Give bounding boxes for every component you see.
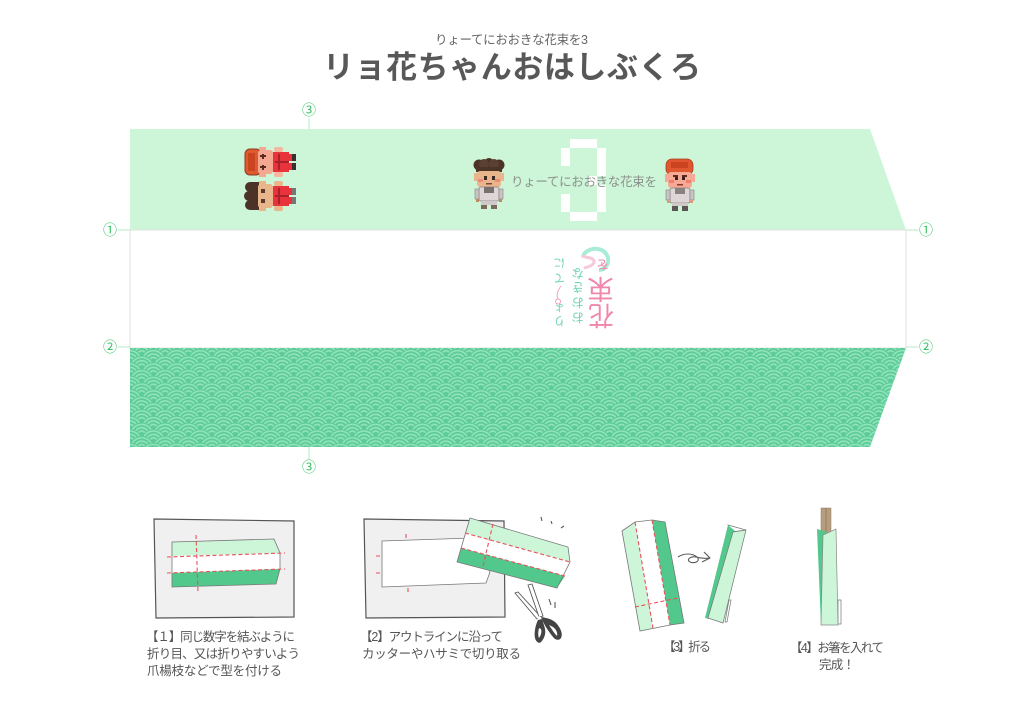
step 2 illustration (364, 518, 570, 618)
logo: upside-down vertical title (554, 249, 614, 330)
step 1 illustration (154, 519, 294, 618)
title: リョ花ちゃんおはしぶくろ (323, 50, 701, 85)
step 3 illustration: unfolded strip (622, 520, 684, 631)
fold marker: circled 3 top: ③ (302, 102, 316, 118)
panel: chopstick wrapper template (130, 129, 906, 447)
sprite: lying dark hair character (244, 181, 296, 211)
icon: scissors (515, 517, 564, 643)
fold marker: circled 3 bottom: ③ (302, 459, 316, 475)
step 4 caption (790, 640, 884, 672)
step 3 caption: 【3】折る (663, 639, 711, 654)
step 4 illustration: finished pouch with chopsticks (817, 508, 841, 625)
fold marker: circled 1 right: ① (919, 222, 933, 238)
fold marker: circled 2 left (103, 339, 130, 355)
step 1 caption: 【１】同じ数字を結ぶように (146, 629, 295, 644)
step 2 caption: カッターやハサミで切り取る (362, 647, 521, 661)
step 1 caption (146, 629, 300, 678)
step 1 caption: 爪楊枝などで型を付ける (147, 663, 282, 678)
teal text りょーてに: ょ (554, 302, 565, 314)
step 2 caption (360, 630, 521, 661)
fold marker: circled 1 left (103, 222, 130, 238)
big pixel numeral 3 (561, 139, 606, 221)
panel: top green band (130, 129, 906, 230)
pink text 花: 花 (588, 300, 614, 330)
fold marker: circled 1 right (906, 222, 933, 238)
step 2 caption: 【2】アウトラインに沿って (360, 630, 503, 644)
fold marker: circled 3 top (302, 102, 316, 129)
teal text おおきな: お (571, 295, 584, 309)
step 4 caption: 【4】お箸を入れて (790, 640, 884, 655)
teal text おおきな: き (571, 280, 584, 294)
small pink heart accent (556, 286, 561, 304)
teal text おおきな (571, 266, 584, 324)
step 3 illustration: folded strip (705, 525, 746, 623)
heart mark (582, 249, 608, 270)
band text: りょーてにおおきな花束を (511, 175, 657, 189)
teal text おおきな: な (571, 266, 584, 280)
sprite: standing red hair character (665, 159, 695, 211)
panel: middle white band (130, 230, 906, 348)
fold marker: circled 2 left: ② (103, 339, 117, 355)
fold marker: circled 2 right: ② (919, 339, 933, 355)
sprite: standing dark hair character (474, 158, 504, 209)
panel: bottom wave pattern band (130, 348, 906, 447)
step 1 caption: 折り目、又は折りやすいよう (147, 646, 300, 661)
pink text を: を (596, 257, 609, 272)
teal text りょーてに: に (554, 256, 565, 268)
subtitle: りょーてにおおきな花束を3 (435, 33, 588, 47)
teal text りょーてに (554, 256, 565, 327)
step 4 caption: 完成！ (819, 658, 855, 672)
arrow: fold direction (678, 552, 710, 563)
fold marker: circled 3 bottom (302, 447, 316, 475)
fold marker: circled 2 right (906, 339, 933, 355)
pink text 束: 束 (587, 273, 614, 303)
fold marker: circled 1 left: ① (103, 222, 117, 238)
sprite: lying red hair character (245, 147, 296, 177)
teal text りょーてに: て (554, 271, 565, 283)
teal text おおきな: お (571, 310, 584, 324)
teal text りょーてに: り (554, 314, 565, 327)
